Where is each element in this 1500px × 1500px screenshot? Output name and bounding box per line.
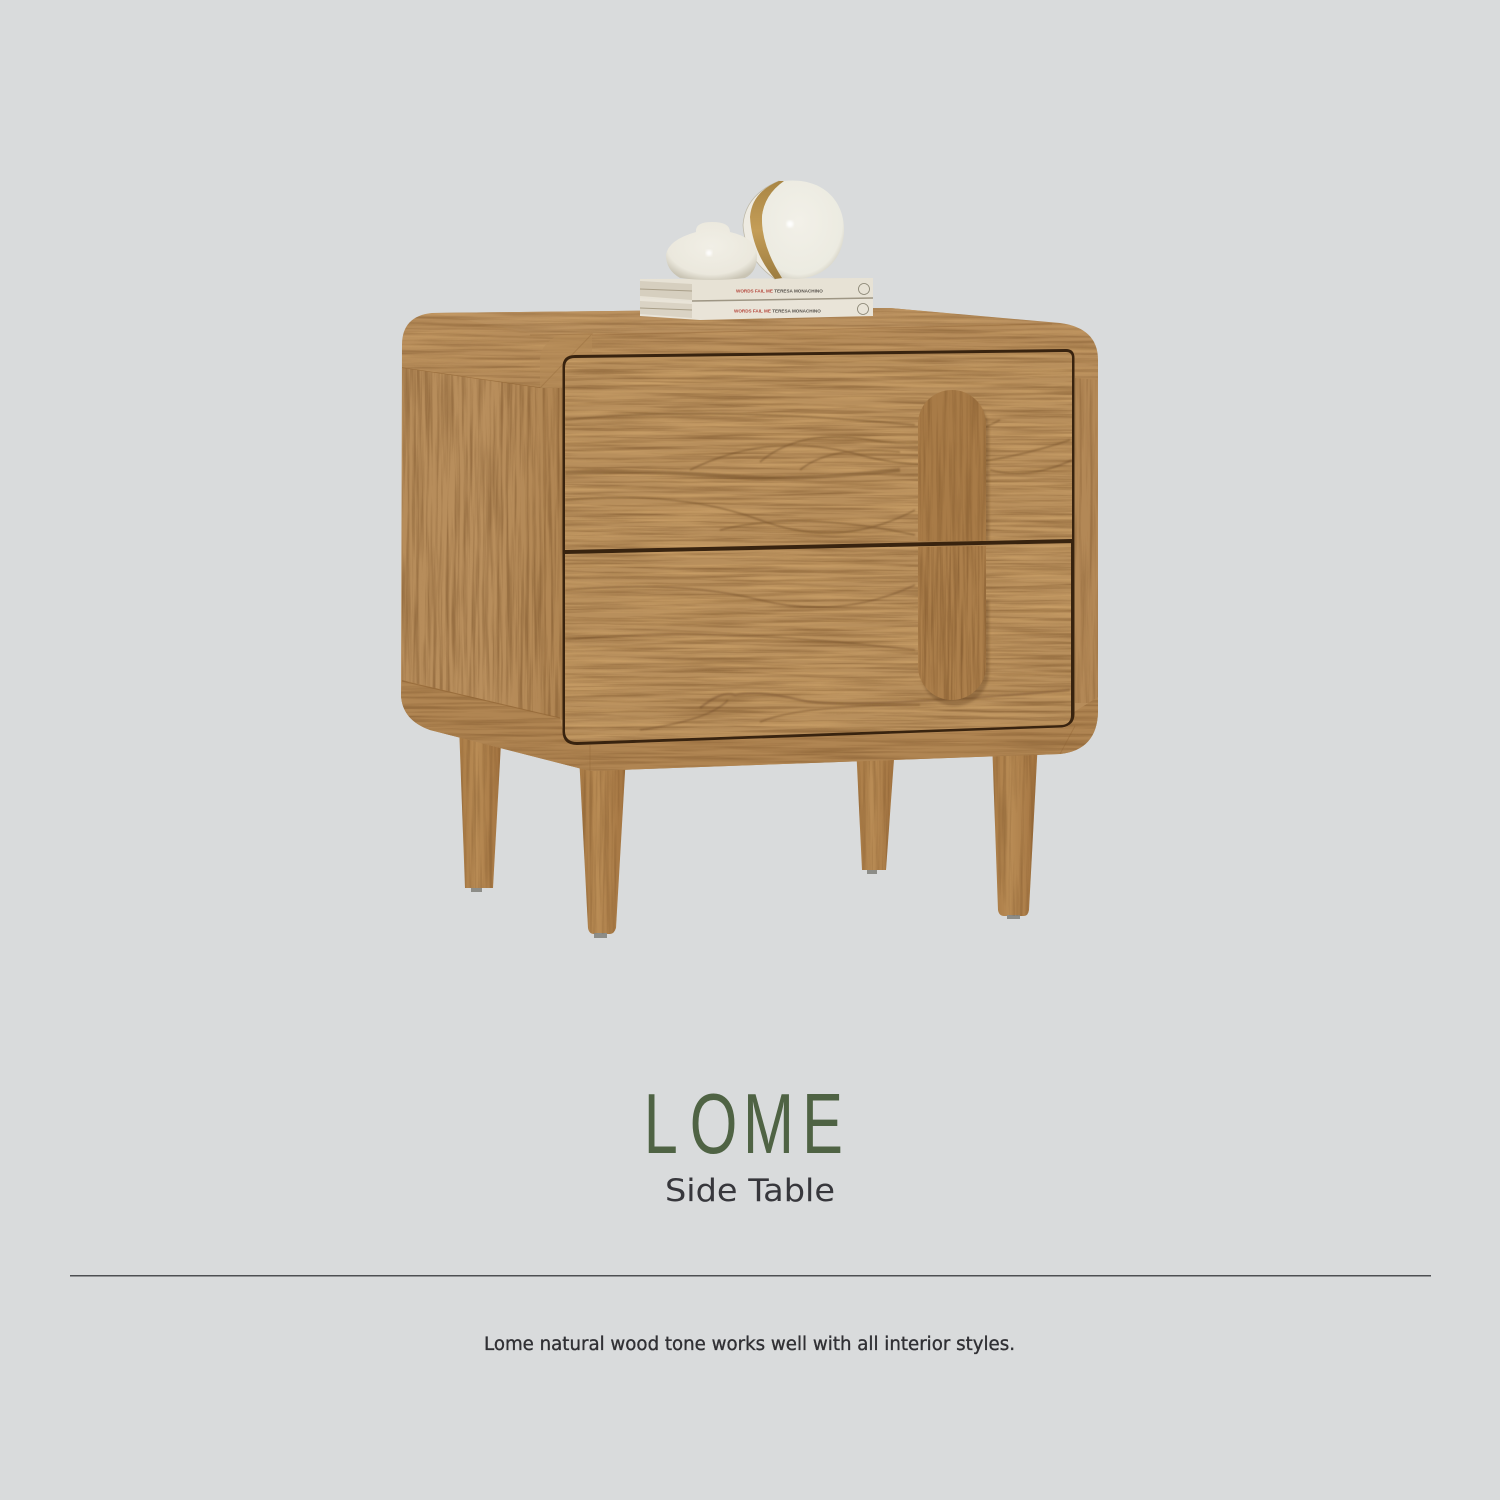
large round vase (743, 181, 844, 279)
drawer handles (916, 388, 989, 706)
body silhouette (401, 308, 1098, 771)
bottom drawer (563, 540, 1075, 744)
description text: Lome natural wood tone works well with all interior styles. (484, 1334, 1015, 1355)
subtitle: Side Table (665, 1173, 835, 1209)
drawer recess shadow (562, 349, 1074, 745)
back left leg (459, 725, 502, 892)
right edge panel (1075, 378, 1098, 703)
top drawer (563, 350, 1075, 552)
infographic canvas (70, 180, 1431, 1354)
stacked books (640, 278, 873, 320)
table top band (400, 305, 1100, 390)
title: LOME (644, 1076, 843, 1171)
book spine text: WORDS FAIL ME TERESA MONACHINO (736, 288, 823, 294)
left side panel (400, 365, 565, 725)
back right leg (856, 745, 895, 874)
small squat vase (666, 222, 757, 280)
table legs (455, 725, 1045, 938)
decor: books and vases (640, 181, 873, 320)
front right leg (992, 740, 1038, 919)
divider line (70, 1275, 1431, 1276)
lower handle (916, 543, 989, 706)
upper handle (916, 388, 989, 543)
bottom frame band (398, 678, 1100, 774)
leg grain (461, 740, 1036, 934)
front left leg (579, 755, 626, 938)
book spine text: WORDS FAIL ME TERESA MONACHINO (734, 308, 821, 314)
product: wooden side table (398, 305, 1100, 938)
